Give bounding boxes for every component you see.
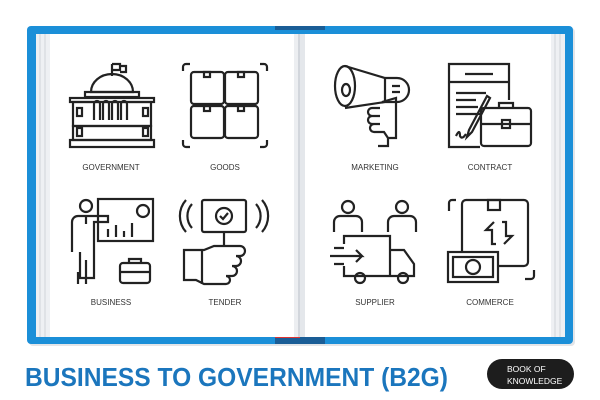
- label: goods: GOODS: [210, 163, 240, 172]
- label: marketing: MARKETING: [351, 163, 399, 172]
- badge: book of knowledge: [487, 359, 574, 389]
- label: commerce: COMMERCE: [466, 298, 514, 307]
- icon: tender: [180, 200, 268, 284]
- badge: book of knowledge: BOOK OF: [507, 364, 546, 374]
- icon: contract: [449, 64, 531, 147]
- label: contract: CONTRACT: [468, 163, 512, 172]
- label: business: BUSINESS: [91, 298, 131, 307]
- icon: supplier: [330, 201, 416, 283]
- icon: commerce: [448, 200, 534, 282]
- icon: government: [70, 64, 154, 147]
- book cover: [27, 26, 575, 346]
- title: BUSINESS TO GOVERNMENT (B2G): [25, 362, 448, 392]
- label: government: GOVERNMENT: [82, 163, 140, 172]
- left page: [36, 34, 300, 337]
- badge: book of knowledge: KNOWLEDGE: [507, 376, 563, 386]
- icon: marketing: [335, 66, 409, 146]
- label: supplier: SUPPLIER: [355, 298, 395, 307]
- icon: business: [72, 199, 153, 284]
- right page: [300, 34, 565, 337]
- label: tender: TENDER: [209, 298, 242, 307]
- icon: goods: [183, 64, 267, 147]
